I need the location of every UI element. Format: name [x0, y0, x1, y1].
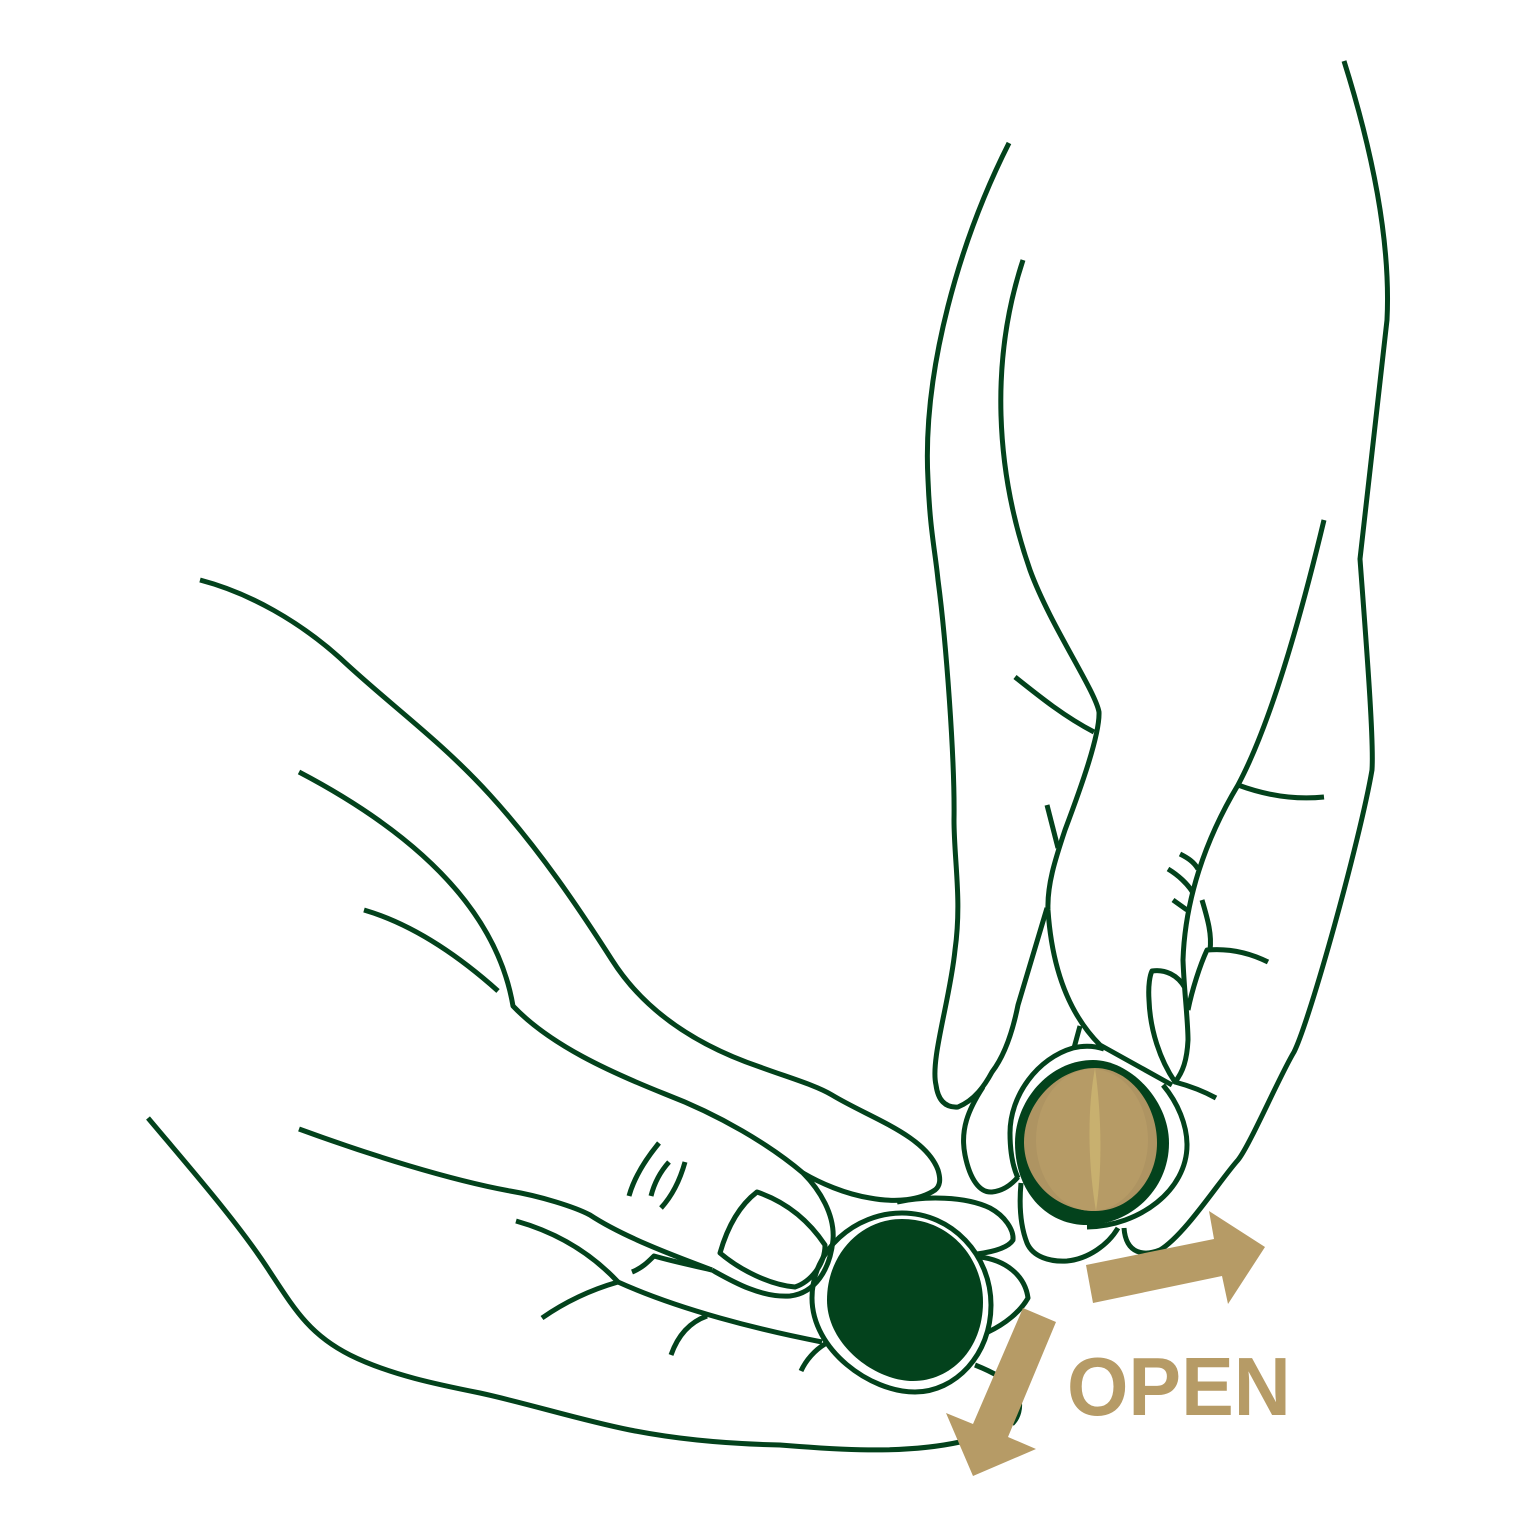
capsule: open bean in right hand: [1010, 1046, 1187, 1227]
arrow: down: [946, 1308, 1056, 1476]
bean: [1024, 1068, 1157, 1211]
bean seam: [1089, 1068, 1100, 1211]
right hand line art: [927, 61, 1388, 1261]
left hand line art: [148, 580, 1028, 1450]
capsule outer ring: [1010, 1046, 1187, 1227]
capsule outer ring: [812, 1213, 991, 1392]
capsule: closed dark capsule in left hand: [812, 1213, 991, 1392]
label: OPEN: OPEN: [1067, 1341, 1291, 1433]
arrow: right: [1086, 1211, 1265, 1304]
capsule dark rim: [1015, 1060, 1169, 1225]
capsule dark fill: [827, 1219, 983, 1381]
bean highlight: [1036, 1069, 1148, 1211]
